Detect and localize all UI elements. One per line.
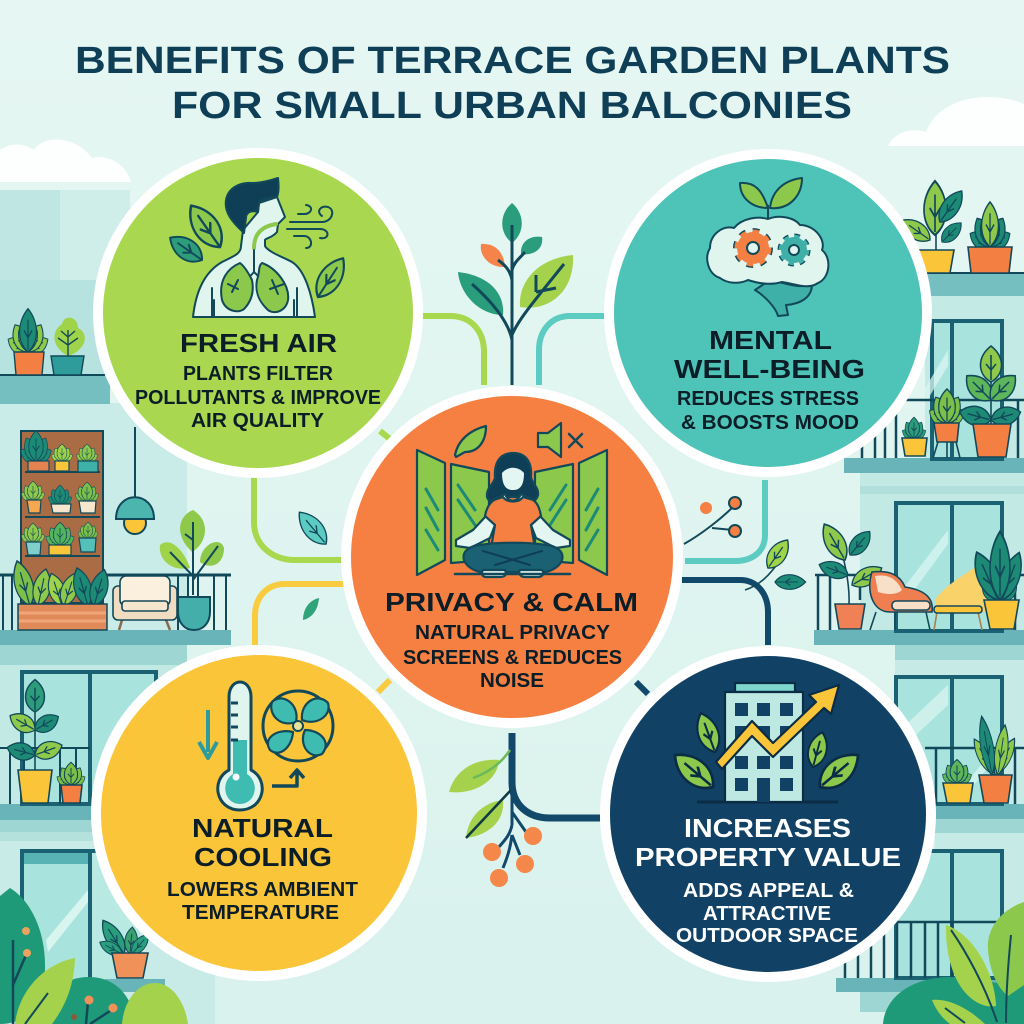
- text: mental well-being description: REDUCES STRESS: [677, 387, 859, 410]
- cloud: top left: [0, 140, 131, 182]
- heading: fresh air: FRESH AIR: [180, 328, 337, 358]
- text: privacy and calm description: NOISE: [480, 669, 544, 692]
- plants: right fourth balcony: [940, 715, 1020, 803]
- text: fresh air description: PLANTS FILTER: [183, 362, 333, 385]
- text: privacy and calm description: [403, 621, 622, 692]
- text: property value description: [676, 879, 858, 947]
- plants: right second balcony: [900, 346, 1023, 458]
- text: fresh air description: POLLUTANTS & IMPROVE: [135, 386, 381, 409]
- heading: increases property value: INCREASES: [684, 813, 851, 843]
- plants: left lower balcony: [5, 680, 87, 803]
- plants: left top shelf: [5, 309, 85, 375]
- title: FOR SMALL URBAN BALCONIES: [172, 85, 852, 127]
- text: mental well-being description: [677, 387, 859, 434]
- armchair: [113, 576, 177, 630]
- corner foliage: bottom right: [883, 902, 1024, 1024]
- corner foliage: bottom left: [0, 888, 188, 1024]
- text: privacy and calm description: SCREENS & REDUCES: [403, 646, 622, 669]
- panel: mental well-being: [609, 154, 927, 472]
- decorative leaf: green: [303, 598, 319, 620]
- panel: privacy and calm: [346, 391, 678, 723]
- text: privacy and calm description: NATURAL PRIVACY: [415, 621, 610, 644]
- text: fresh air description: [135, 362, 381, 432]
- text: property value description: OUTDOOR SPACE: [676, 924, 858, 947]
- text: mental well-being description: & BOOSTS MOOD: [681, 411, 859, 434]
- text: fresh air description: AIR QUALITY: [191, 409, 324, 432]
- decorative sprig: centre top: [458, 203, 573, 385]
- right building: [814, 273, 1024, 1012]
- panel: fresh air: [98, 153, 418, 473]
- heading: natural cooling: [192, 813, 333, 872]
- decorative sprig: centre bottom: [449, 750, 542, 887]
- text: property value description: ADDS APPEAL &: [683, 879, 854, 902]
- title: BENEFITS OF TERRACE GARDEN PLANTS: [75, 40, 950, 82]
- heading: mental well-being: WELL-BEING: [674, 354, 865, 384]
- heading: privacy and calm: PRIVACY & CALM: [385, 587, 638, 617]
- icon: person breathing with lungs: [164, 178, 352, 317]
- heading: mental well-being: [674, 325, 865, 384]
- icon: thermometer and fan: [199, 682, 333, 810]
- text: property value description: ATTRACTIVE: [703, 902, 831, 925]
- heading: mental well-being: MENTAL: [709, 325, 832, 355]
- text: natural cooling description: LOWERS AMBIENT: [167, 878, 358, 901]
- decorative leaf: teal: [292, 506, 333, 550]
- icon: meditating person between green screens: [417, 423, 607, 577]
- vertical garden wall: [18, 431, 103, 603]
- heading: increases property value: [635, 813, 901, 872]
- icon: building with rising arrow: [667, 683, 866, 802]
- heading: increases property value: PROPERTY VALUE: [635, 842, 901, 872]
- potted tree on left balcony: [160, 510, 224, 630]
- hanging lamp: [116, 427, 154, 534]
- decorative berry branch: [684, 497, 741, 544]
- plants: right top shelf: [897, 181, 1013, 273]
- heading: natural cooling: NATURAL: [192, 813, 333, 843]
- left building: [0, 190, 231, 1024]
- cloud: top right: [888, 97, 1024, 146]
- panel: natural cooling: [96, 650, 422, 976]
- connector lines: [254, 316, 768, 818]
- heading: natural cooling: COOLING: [194, 842, 332, 872]
- icon: brain with gears and sprout: [707, 178, 828, 316]
- text: natural cooling description: TEMPERATURE: [182, 901, 339, 924]
- text: natural cooling description: [167, 878, 358, 924]
- panel: increases property value: [605, 651, 931, 977]
- decorative sprig: right: [745, 535, 806, 590]
- planter box with plants: [9, 559, 112, 630]
- plants and chairs: right third balcony: [816, 519, 1024, 630]
- title: [75, 40, 950, 127]
